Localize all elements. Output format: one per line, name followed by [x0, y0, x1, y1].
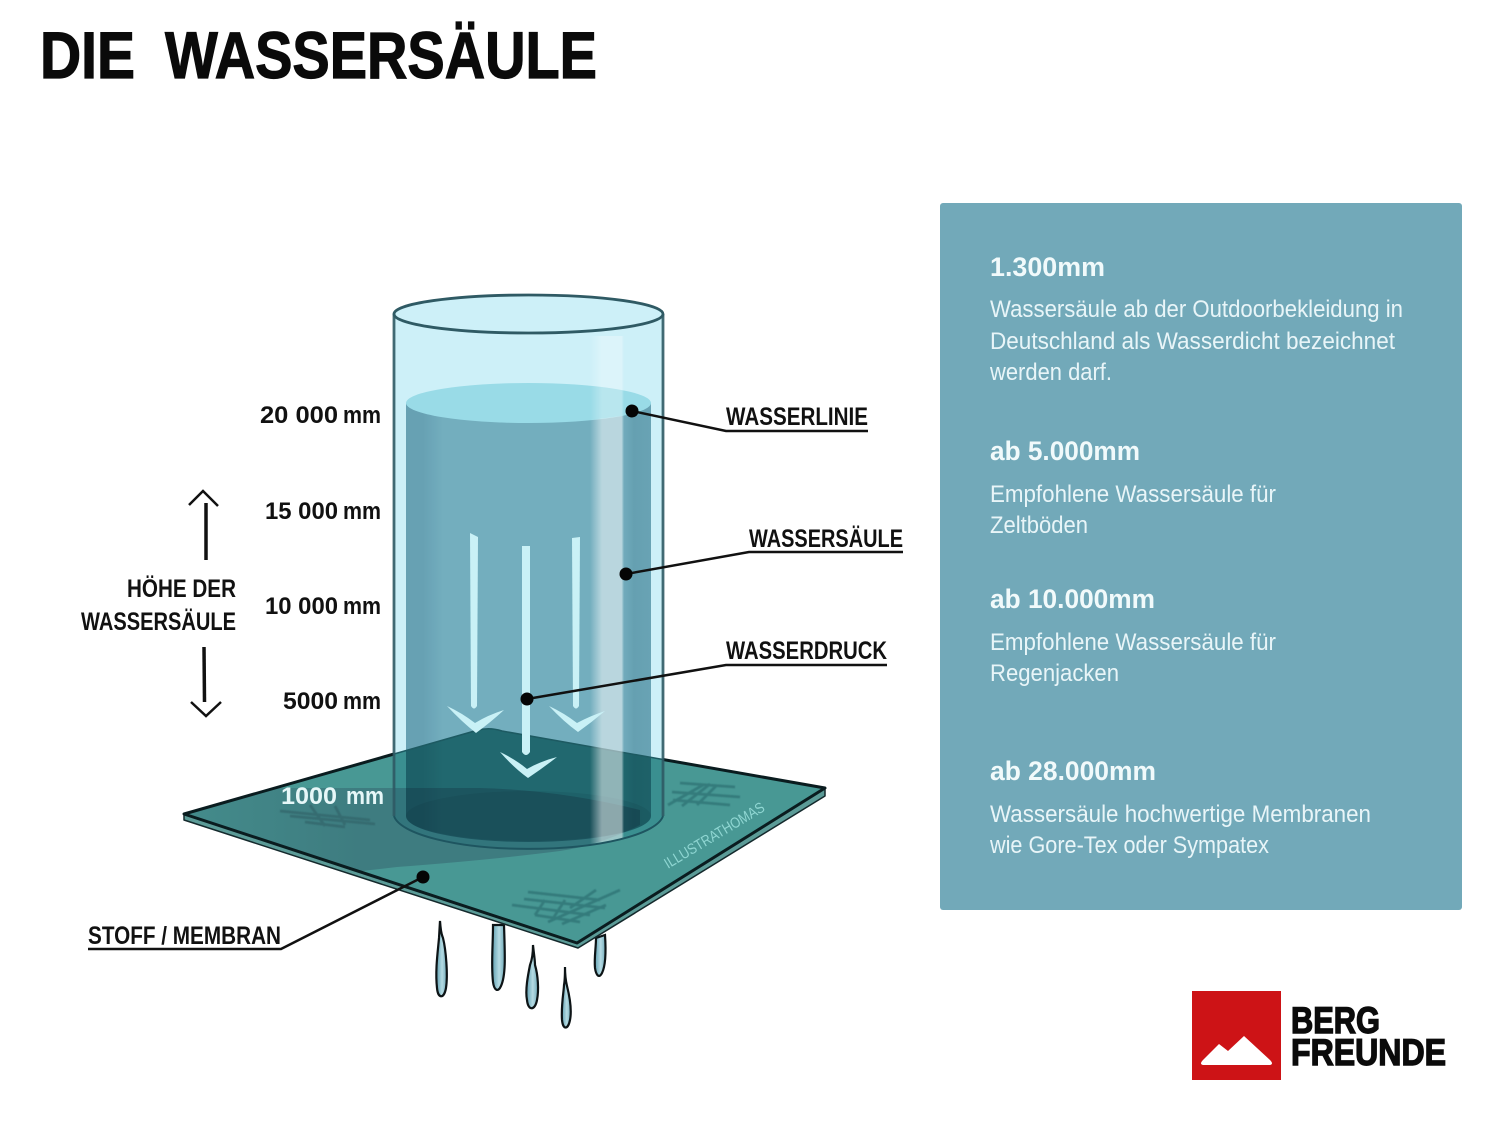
- logo: Bergfreunde: [1192, 991, 1446, 1080]
- entry: ab 5.000mm: Empfohlene Wassersäule für: [990, 481, 1276, 508]
- title: WASSERSÄULE: [165, 18, 597, 92]
- callout: Wassersäule: [620, 525, 903, 580]
- fabric weave marks: [280, 783, 740, 924]
- water bottom: [406, 791, 651, 841]
- title: [40, 18, 597, 92]
- glass cylinder: [394, 295, 663, 868]
- scale labels: mm: [343, 688, 381, 715]
- entry: ab 5.000mm: [990, 436, 1276, 539]
- scale labels: mm: [346, 783, 384, 810]
- entry: ab 28.000mm: ab 28.000mm: [990, 756, 1156, 786]
- water column: [406, 403, 651, 842]
- fabric edge thickness: [184, 788, 825, 948]
- callout: Wasserlinie: [626, 403, 868, 431]
- entry: ab 10.000mm: Regenjacken: [990, 660, 1119, 687]
- entry: ab 28.000mm: [989, 756, 1371, 859]
- scale labels: 1000: [281, 783, 337, 810]
- water surface: [406, 383, 651, 423]
- callout: Stoff / Membran: STOFF / MEMBRAN: [88, 922, 281, 950]
- glass outline: [394, 295, 663, 849]
- entry: ab 5.000mm: ab 5.000mm: [990, 436, 1140, 466]
- callout: Wasserdruck: [520, 637, 887, 706]
- height label with arrows: WASSERSÄULE: [81, 608, 236, 636]
- fabric membrane: [180, 729, 825, 948]
- arrow down: [191, 647, 221, 716]
- pressure arrows: [447, 533, 605, 778]
- scale labels: mm: [343, 498, 381, 525]
- scale labels: mm: [343, 593, 381, 620]
- glass highlight: [590, 336, 624, 868]
- scale labels: [260, 402, 384, 810]
- entry: ab 5.000mm: Zeltböden: [990, 512, 1088, 539]
- fabric outline: [184, 754, 825, 943]
- info panel: [940, 203, 1462, 910]
- entry: 1.300mm: Wassersäule ab der Outdoorbekleidung in: [990, 296, 1403, 323]
- callout: Stoff / Membran: [88, 870, 430, 950]
- credit: ILLUSTRATHOMAS: [661, 799, 768, 872]
- scale labels: mm: [343, 402, 381, 429]
- callout: Wasserdruck: WASSERDRUCK: [726, 637, 887, 665]
- entry: ab 28.000mm: Wassersäule hochwertige Membranen: [990, 801, 1371, 828]
- entry: ab 10.000mm: Empfohlene Wassersäule für: [990, 629, 1276, 656]
- scale labels: 20 000: [260, 402, 338, 429]
- entry: ab 28.000mm: wie Gore-Tex oder Sympatex: [989, 832, 1269, 859]
- scale labels: 10 000: [265, 593, 338, 620]
- entry: 1.300mm: [989, 252, 1403, 386]
- height label with arrows: HÖHE DER: [127, 574, 236, 603]
- scale labels: 15 000: [265, 498, 338, 525]
- arrow up: [189, 491, 218, 560]
- height label with arrows: [81, 491, 236, 716]
- logo: Bergfreunde: FREUNDE: [1291, 1032, 1446, 1073]
- fabric shadow: [180, 788, 640, 872]
- logo: Bergfreunde: BERG: [1291, 1000, 1380, 1041]
- fabric edge seen through glass: [394, 729, 663, 760]
- entry: 1.300mm: werden darf.: [989, 359, 1112, 386]
- callout: Wasserlinie: WASSERLINIE: [726, 403, 868, 431]
- entry: ab 10.000mm: ab 10.000mm: [990, 584, 1155, 614]
- title: DIE: [40, 18, 135, 92]
- entry: 1.300mm: Deutschland als Wasserdicht bezeichnet: [990, 328, 1395, 355]
- icon: mountain: [1201, 1036, 1272, 1065]
- entry: ab 10.000mm: [990, 584, 1276, 687]
- scale labels: 5000: [283, 688, 338, 715]
- water drops: [436, 921, 606, 1028]
- entry: 1.300mm: 1.300mm: [990, 252, 1105, 282]
- callout: Wassersäule: WASSERSÄULE: [749, 525, 903, 553]
